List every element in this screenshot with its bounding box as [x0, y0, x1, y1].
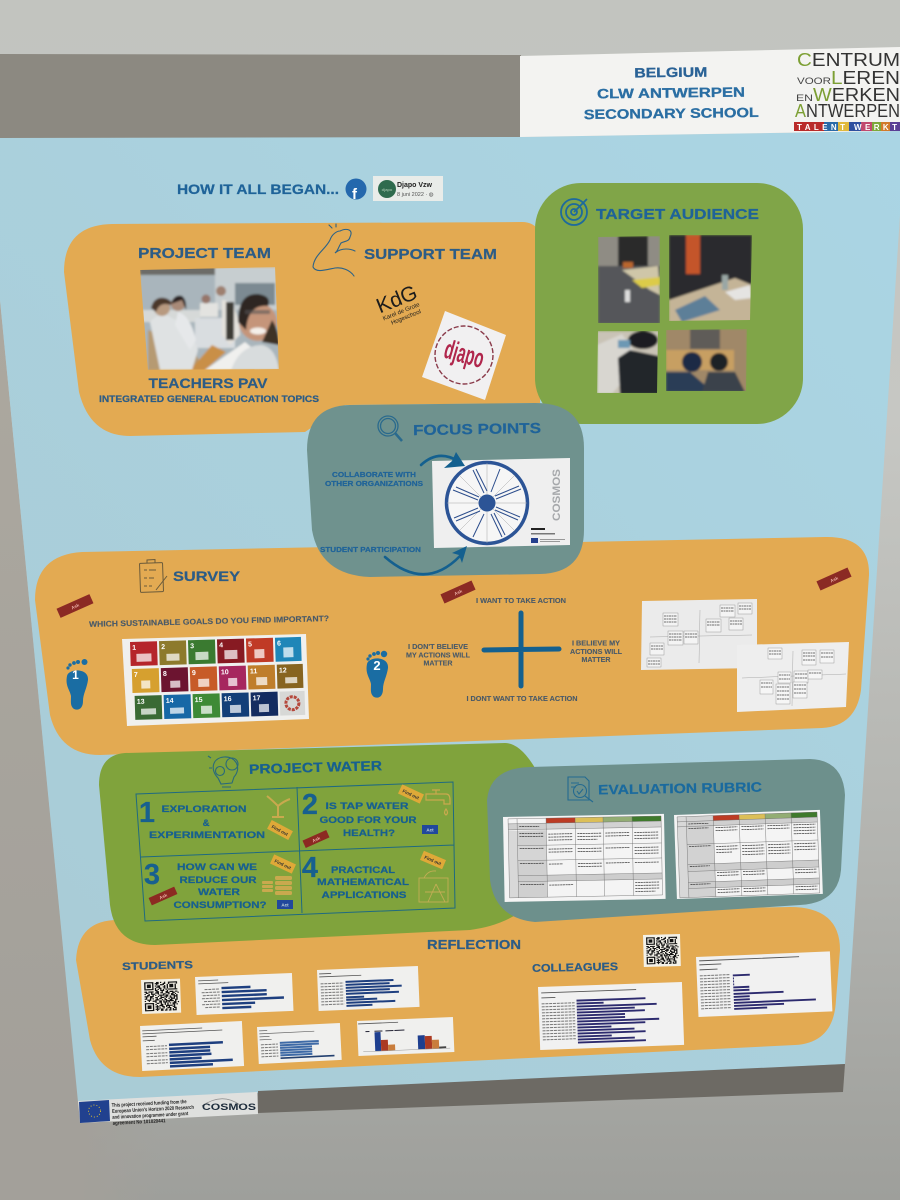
- qr code: students: [141, 979, 181, 1014]
- sustainable development goals grid: 1: [132, 645, 136, 652]
- heading: teachers pav: TEACHERS PAV: [148, 375, 268, 391]
- sustainable development goals grid: 6: [277, 641, 281, 648]
- header text: BELGIUM: [634, 65, 707, 80]
- photo: student at laptop: [597, 331, 659, 394]
- funding text: This project received funding from the: [112, 1099, 187, 1109]
- label: collaborate: COLLABORATE WITH: [332, 470, 416, 479]
- facebook post header: Djapo Vzw: [397, 182, 433, 189]
- logo: djapo: djapo: [441, 334, 488, 374]
- icon: document with magnifier: [568, 777, 593, 802]
- quadrant matrix labels: I DON'T BELIEVE: [408, 642, 468, 651]
- cell 3: reduce consumption: WATER: [198, 887, 240, 898]
- logo: djapo: [422, 311, 506, 400]
- chart: students B: [317, 966, 420, 1011]
- logo: Centrum voor Leren en Werken Antwerpen: TALENT WERKT: [797, 123, 897, 132]
- label: student participation: STUDENT PARTICIPATION: [320, 545, 421, 554]
- icon: EU flag: [79, 1100, 110, 1123]
- cell 1: exploration: &: [203, 818, 210, 829]
- rubric table 2: [674, 810, 823, 899]
- panel: target audience: [535, 183, 803, 424]
- icon: footprint 1: 1: [72, 668, 79, 682]
- tag: ask: Ask: [158, 892, 168, 900]
- logo: Centrum voor Leren en Werken Antwerpen: [794, 50, 900, 132]
- chart: colleagues F: [538, 982, 684, 1050]
- icon: footprint 2: 2: [373, 658, 381, 673]
- panel: project water: [99, 743, 535, 945]
- logo: Centrum voor Leren en Werken Antwerpen: LEREN: [831, 68, 900, 88]
- tag: ask 3: Ask: [829, 575, 839, 583]
- grid of water activities: [136, 782, 455, 921]
- tag: ask: Ask: [311, 835, 321, 843]
- panel: focus points: [307, 403, 584, 577]
- tag: ask 3: [816, 568, 852, 590]
- quadrant matrix labels: I BELIEVE MY: [572, 638, 620, 648]
- dark band at poster bottom: [258, 1064, 845, 1113]
- tag: find out: Find out: [424, 855, 442, 866]
- tag: ask: [149, 887, 177, 905]
- quadrant matrix labels: I DONT WANT TO TAKE ACTION: [466, 694, 578, 703]
- quadrant matrix labels: MATTER: [582, 655, 611, 664]
- tag: act: [277, 900, 293, 909]
- sustainable development goals grid: 8: [163, 671, 167, 678]
- tag: ask 2: Ask: [453, 588, 463, 596]
- chart: students C: [140, 1021, 244, 1071]
- heading: support team: SUPPORT TEAM: [364, 246, 497, 263]
- header text: [583, 64, 759, 122]
- sustainable development goals grid: [122, 634, 309, 726]
- tag: find out: Find out: [271, 824, 289, 837]
- cell 2: tap water: [302, 784, 450, 848]
- heading: project team: PROJECT TEAM: [138, 245, 271, 262]
- cell 1: exploration: [139, 796, 293, 841]
- cell 2: tap water: GOOD FOR YOUR: [320, 815, 417, 826]
- heading: target audience: TARGET AUDIENCE: [596, 206, 759, 223]
- chart: students A: [195, 973, 294, 1015]
- panel: project and support team: [64, 222, 540, 436]
- photo: project team: [140, 267, 279, 370]
- cell 3: reduce consumption: 3: [144, 859, 160, 891]
- heading: focus points: FOCUS POINTS: [413, 421, 542, 439]
- tag: find out: [398, 784, 424, 804]
- quadrant matrix labels: ACTIONS WILL: [570, 647, 622, 656]
- icon: coins: [262, 876, 292, 895]
- tag: ask: [302, 830, 330, 848]
- tag: find out: [267, 820, 293, 840]
- logo: KdG: Karel de Grote: [382, 302, 421, 322]
- photo: classroom table: [598, 236, 660, 324]
- heading: survey: SURVEY: [173, 568, 241, 584]
- sustainable development goals grid: 4: [219, 642, 223, 649]
- darker wall at left: [0, 300, 78, 1100]
- facebook post header: djapo: [382, 187, 393, 192]
- quadrant matrix labels: I WANT TO TAKE ACTION: [476, 596, 566, 605]
- icon: target: [561, 199, 587, 225]
- question text: WHICH SUSTAINABLE GOALS DO YOU FIND IMPORTANT?: [89, 614, 329, 629]
- logo: COSMOS: [202, 1099, 256, 1112]
- cell 3: reduce consumption: CONSUMPTION?: [174, 900, 267, 911]
- tag: find out: [420, 851, 446, 869]
- sustainable development goals grid: 9: [192, 670, 196, 677]
- funding text: [112, 1099, 195, 1127]
- heading: colleagues: COLLEAGUES: [532, 961, 618, 975]
- label: collaborate: [325, 470, 423, 488]
- wheel: [446, 462, 528, 544]
- sustainable development goals grid: 17: [253, 695, 261, 702]
- logo: Centrum voor Leren en Werken Antwerpen: CENTRUM: [797, 50, 900, 70]
- photo: students with cap: [666, 329, 747, 392]
- heading: evaluation rubric: EVALUATION RUBRIC: [598, 780, 762, 797]
- funding text: and innovation programme under grant: [112, 1111, 189, 1121]
- panel: evaluation rubric: [487, 759, 845, 922]
- label: collaborate: OTHER ORGANIZATIONS: [325, 479, 423, 488]
- wheel of competences card: [432, 458, 570, 548]
- icon: light bulb with gears: [208, 756, 238, 787]
- funding text: agreement No 101020441: [113, 1118, 166, 1127]
- sustainable development goals grid: 11: [250, 668, 258, 675]
- tag: find out: Find out: [274, 858, 292, 871]
- tag: act: [422, 825, 438, 834]
- logo: Centrum voor Leren en Werken Antwerpen: EN: [796, 93, 813, 103]
- cell 3: reduce consumption: REDUCE OUR: [180, 875, 257, 886]
- sustainable development goals grid: 16: [224, 696, 232, 703]
- logo: Centrum voor Leren en Werken Antwerpen: WERKEN: [813, 85, 900, 105]
- icon: sprout: [267, 796, 290, 818]
- how it all began line: [177, 176, 443, 203]
- quadrant matrix labels: MATTER: [424, 658, 453, 668]
- cell 2: tap water: HEALTH?: [343, 828, 395, 839]
- sustainable development goals grid: 14: [166, 698, 174, 705]
- header text: SECONDARY SCHOOL: [584, 105, 759, 122]
- quadrant matrix labels: MY ACTIONS WILL: [406, 650, 470, 660]
- tag: find out: Find out: [402, 788, 420, 801]
- sustainable development goals grid: 10: [221, 669, 229, 676]
- icon: facebook: f: [352, 186, 358, 203]
- icon: math tools: [419, 871, 448, 902]
- logo: Centrum voor Leren en Werken Antwerpen: VOOR: [797, 76, 832, 86]
- cell 1: exploration: EXPLORATION: [162, 804, 247, 815]
- heading: project water: PROJECT WATER: [249, 758, 382, 777]
- logo: KdG: KdG: [373, 281, 421, 318]
- survey result card 1: [641, 599, 757, 670]
- cell 2: tap water: IS TAP WATER: [326, 801, 409, 812]
- cell 4: mathematics: APPLICATIONS: [322, 890, 406, 901]
- sustainable development goals grid: 3: [190, 643, 194, 650]
- cell 4: mathematics: MATHEMATICAL: [317, 877, 409, 888]
- chart: students D: [257, 1023, 342, 1064]
- panel: survey: [35, 537, 869, 755]
- cell 4: mathematics: PRACTICAL: [331, 865, 395, 876]
- photo: students measuring: [669, 235, 752, 322]
- header text: CLW ANTWERPEN: [597, 85, 745, 101]
- tag: ask 1: [57, 594, 93, 618]
- cell 1: exploration: 1: [139, 797, 155, 829]
- qr code: colleagues: [643, 934, 681, 967]
- tag: find out: [270, 854, 296, 874]
- funding acknowledgement strip: [78, 1092, 258, 1127]
- cell 4: mathematics: [302, 851, 448, 902]
- heading: students: STUDENTS: [122, 959, 193, 973]
- survey result card 2: [737, 642, 849, 712]
- sustainable development goals grid: 12: [279, 667, 287, 675]
- icon: footprint 1: [66, 659, 88, 710]
- logo: KdG: Hogeschool: [390, 309, 422, 327]
- rubric table 1: [503, 814, 666, 902]
- facebook post header: 8 juni 2022 · ◍: [397, 192, 434, 198]
- tag: act: Act: [281, 902, 289, 908]
- arrow: participation to wheel: [385, 546, 467, 574]
- how it all began line: HOW IT ALL BEGAN...: [177, 182, 339, 197]
- tag: act: Act: [426, 828, 434, 832]
- subheading: general education: INTEGRATED GENERAL EDUCATION TOPICS: [99, 394, 319, 404]
- sustainable development goals grid: 15: [195, 697, 203, 704]
- text: COSMOS: COSMOS: [551, 469, 563, 521]
- quadrant matrix labels: [406, 596, 622, 703]
- cell 3: reduce consumption: HOW CAN WE: [177, 862, 257, 873]
- sustainable development goals grid: 2: [161, 644, 165, 651]
- icon: clipboard: [140, 560, 167, 592]
- tag: ask 1: Ask: [70, 602, 80, 610]
- cell 2: tap water: 2: [302, 789, 318, 821]
- chart: students E: [357, 1017, 454, 1056]
- icon: footprint 2: [366, 651, 388, 698]
- heading: reflection: REFLECTION: [427, 938, 521, 952]
- facebook post header: [373, 176, 443, 201]
- icon: tap: [426, 790, 450, 815]
- top grey strip of poster: [0, 54, 521, 138]
- darker wall at lower left: [0, 1100, 160, 1200]
- sustainable development goals grid: 13: [137, 699, 145, 706]
- arrow: collaborate to wheel: [421, 452, 465, 468]
- funding text: European Union's Horizon 2020 Research: [112, 1105, 194, 1115]
- icon: facebook: [346, 178, 366, 203]
- icon: flexed arm: [313, 224, 355, 276]
- icon: magnifier: [378, 416, 402, 441]
- header label: [520, 47, 900, 137]
- quadrant cross: [484, 613, 559, 686]
- logo: COSMOS: COSMOS: [202, 1102, 256, 1112]
- tag: ask 2: [440, 581, 476, 603]
- sustainable development goals grid: 7: [134, 672, 138, 679]
- sustainable development goals grid: 5: [248, 641, 252, 648]
- cell 1: exploration: EXPERIMENTATION: [149, 830, 265, 841]
- cell 3: reduce consumption: [144, 854, 296, 911]
- panel: reflection: [76, 907, 840, 1077]
- cell 4: mathematics: 4: [302, 852, 318, 884]
- chart: colleagues G: [696, 951, 832, 1017]
